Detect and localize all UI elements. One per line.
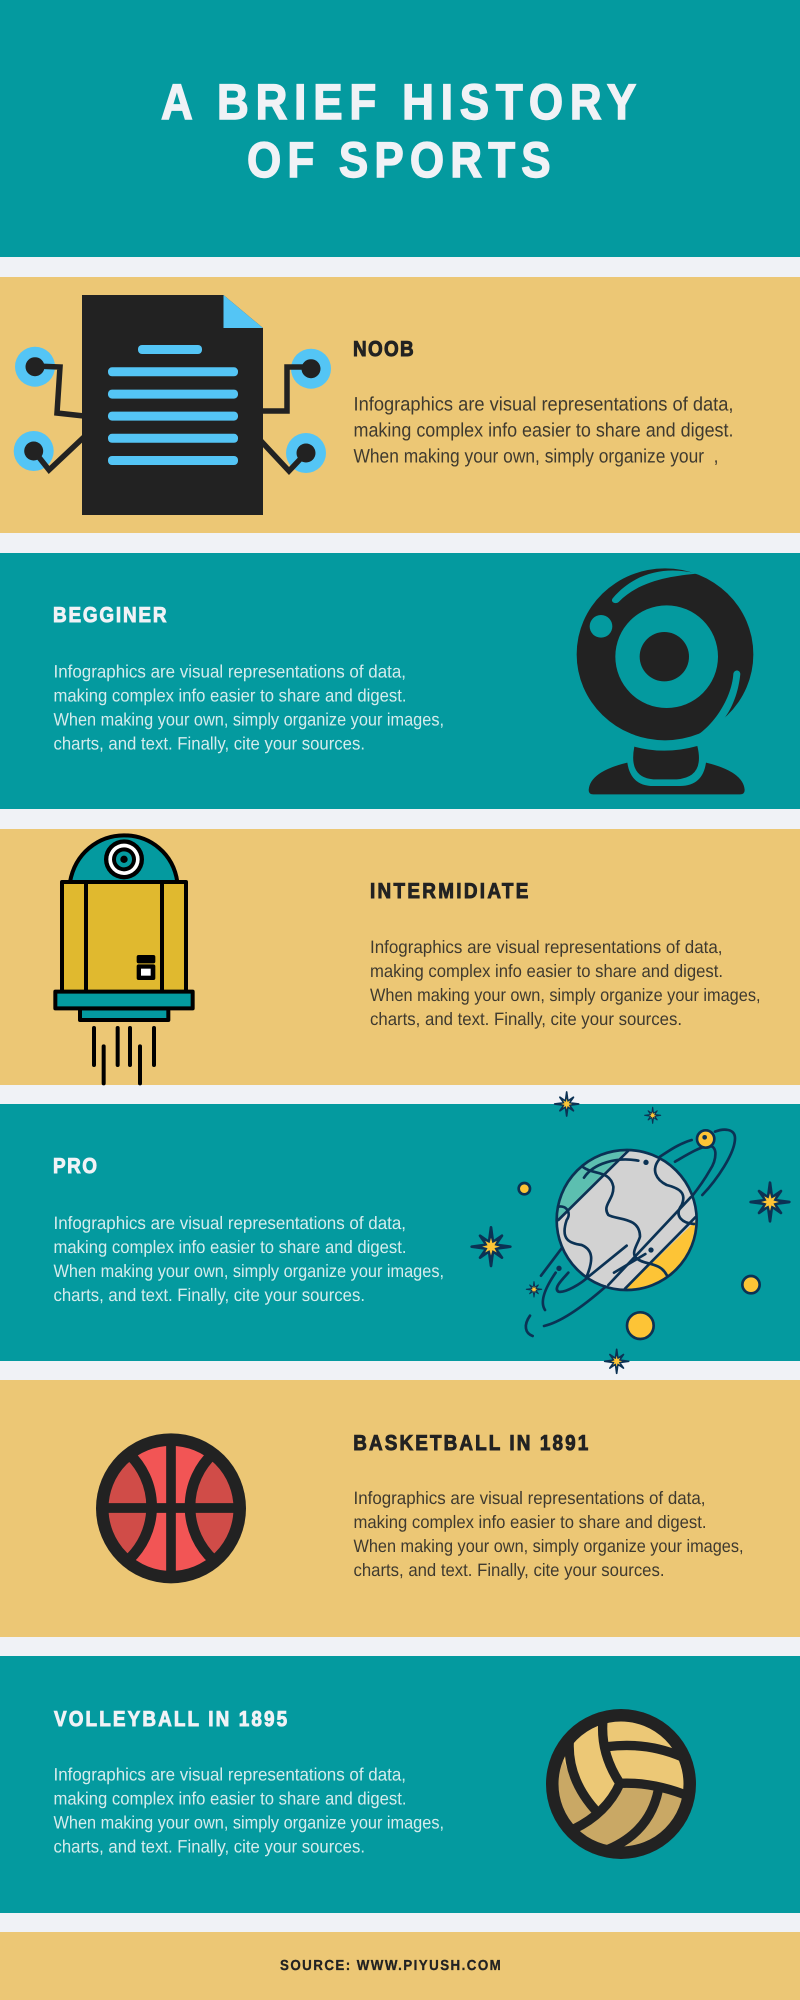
text block: basketball: making complex info easier to share and digest. bbox=[354, 1512, 706, 1532]
header panel bbox=[0, 0, 800, 257]
text block: intermidiate: When making your own, simply organize your images, bbox=[370, 985, 760, 1005]
heading: noob: NOOB bbox=[353, 337, 414, 361]
text block: noob: making complex info easier to share and digest. bbox=[354, 420, 734, 442]
text block: noob: Infographics are visual representations of data, bbox=[354, 394, 734, 416]
text block: volleyball: When making your own, simply organize your images, bbox=[54, 1812, 444, 1832]
text block: volleyball: making complex info easier to share and digest. bbox=[54, 1788, 406, 1808]
icon: webcam bbox=[577, 568, 753, 794]
panel: intermediate bbox=[0, 829, 800, 1085]
heading: begginer: BEGGINER bbox=[53, 603, 167, 627]
heading: basketball in 1891: BASKETBALL IN 1891 bbox=[353, 1431, 588, 1455]
panel: noob bbox=[0, 277, 800, 533]
text block: pro: making complex info easier to share and digest. bbox=[54, 1237, 406, 1257]
text block: basketball: When making your own, simply organize your images, bbox=[354, 1536, 744, 1556]
text block: noob: When making your own, simply organize your , bbox=[354, 446, 718, 468]
text block: noob bbox=[354, 394, 734, 468]
text block: volleyball: charts, and text. Finally, cite your sources. bbox=[54, 1836, 365, 1856]
heading: volleyball in 1895: VOLLEYBALL IN 1895 bbox=[54, 1707, 287, 1731]
text block: pro bbox=[54, 1213, 444, 1305]
text block: intermidiate: Infographics are visual representations of data, bbox=[370, 937, 722, 957]
text block: intermidiate bbox=[370, 937, 760, 1029]
icon: basketball bbox=[96, 1433, 246, 1583]
panel: basketball bbox=[0, 1380, 800, 1637]
text block: basketball: charts, and text. Finally, cite your sources. bbox=[354, 1560, 664, 1580]
icon: planet with orbit and stars bbox=[472, 1092, 789, 1373]
source line: SOURCE: WWW.PIYUSH.COM bbox=[280, 1958, 501, 1974]
icon: document with circuit nodes bbox=[14, 295, 331, 515]
panel: pro bbox=[0, 1092, 800, 1373]
panel: footer bbox=[0, 1932, 800, 2000]
title: OF SPORTS bbox=[247, 132, 551, 188]
title bbox=[161, 74, 636, 188]
text block: intermidiate: charts, and text. Finally, cite your sources. bbox=[370, 1009, 682, 1029]
text block: begginer: When making your own, simply organize your images, bbox=[54, 709, 444, 729]
text block: begginer: charts, and text. Finally, cite your sources. bbox=[54, 733, 365, 753]
text block: basketball: Infographics are visual representations of data, bbox=[354, 1488, 706, 1508]
text block: basketball bbox=[354, 1488, 744, 1580]
heading: pro: PRO bbox=[53, 1154, 97, 1178]
panel: volleyball bbox=[0, 1656, 800, 1913]
icon: volleyball bbox=[546, 1709, 696, 1860]
text block: begginer: Infographics are visual representations of data, bbox=[54, 661, 406, 681]
panel: beginner bbox=[0, 553, 800, 809]
text block: volleyball bbox=[54, 1764, 444, 1856]
text block: pro: charts, and text. Finally, cite your sources. bbox=[54, 1285, 365, 1305]
icon: rocket capsule bbox=[55, 835, 193, 1083]
title: A BRIEF HISTORY bbox=[161, 74, 636, 130]
text block: pro: When making your own, simply organize your images, bbox=[54, 1261, 444, 1281]
text block: intermidiate: making complex info easier to share and digest. bbox=[370, 961, 723, 981]
heading: intermidiate: INTERMIDIATE bbox=[370, 879, 528, 903]
text block: begginer bbox=[54, 661, 444, 753]
text block: volleyball: Infographics are visual representations of data, bbox=[54, 1764, 406, 1784]
text block: begginer: making complex info easier to share and digest. bbox=[54, 685, 406, 705]
text block: pro: Infographics are visual representations of data, bbox=[54, 1213, 406, 1233]
